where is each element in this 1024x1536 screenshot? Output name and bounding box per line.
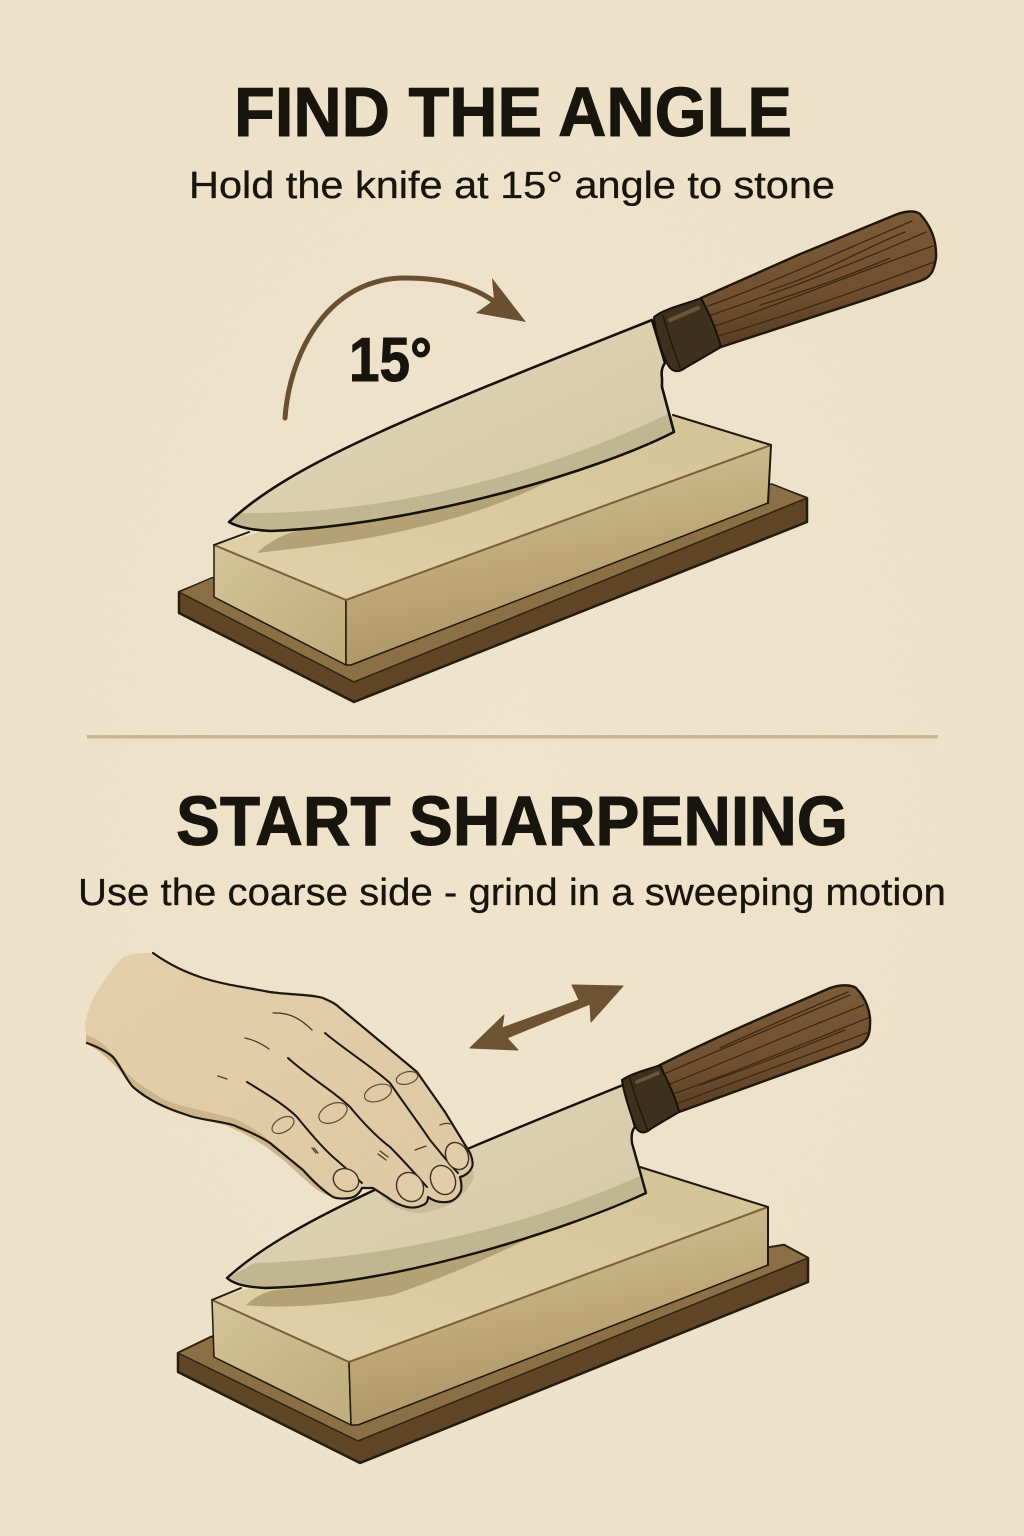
- curved angle arrow: [285, 278, 526, 418]
- stone base: [178, 1245, 808, 1463]
- knife collar: [654, 298, 721, 371]
- subheading: hold the knife: Hold the knife at 15° angle to stone: [189, 165, 835, 207]
- illustration: knife on whetstone at 15 degrees: [179, 211, 936, 702]
- knife blade: [227, 1085, 646, 1288]
- divider: [87, 735, 938, 738]
- knife blade: [229, 320, 674, 531]
- subheading: use the coarse side: Use the coarse side - grind in a sweeping motion: [78, 872, 946, 914]
- heading: find the angle: FIND THE ANGLE: [234, 73, 792, 151]
- angle label: 15 degrees: 15°: [349, 326, 432, 395]
- sweeping double arrow: [470, 985, 623, 1050]
- knife shadow on stone: [257, 440, 620, 553]
- knife handle: [701, 211, 936, 347]
- heading: start sharpening: START SHARPENING: [176, 782, 848, 860]
- knife collar: [622, 1065, 679, 1132]
- whetstone: [214, 415, 771, 665]
- knife handle: [660, 985, 870, 1112]
- finger shadow on blade: [380, 1160, 474, 1213]
- illustration: hand sharpening knife on whetstone: [85, 953, 870, 1463]
- whetstone: [212, 1167, 768, 1425]
- knife shadow on stone: [246, 1200, 600, 1307]
- stone base: [179, 484, 807, 702]
- hand: [85, 953, 473, 1208]
